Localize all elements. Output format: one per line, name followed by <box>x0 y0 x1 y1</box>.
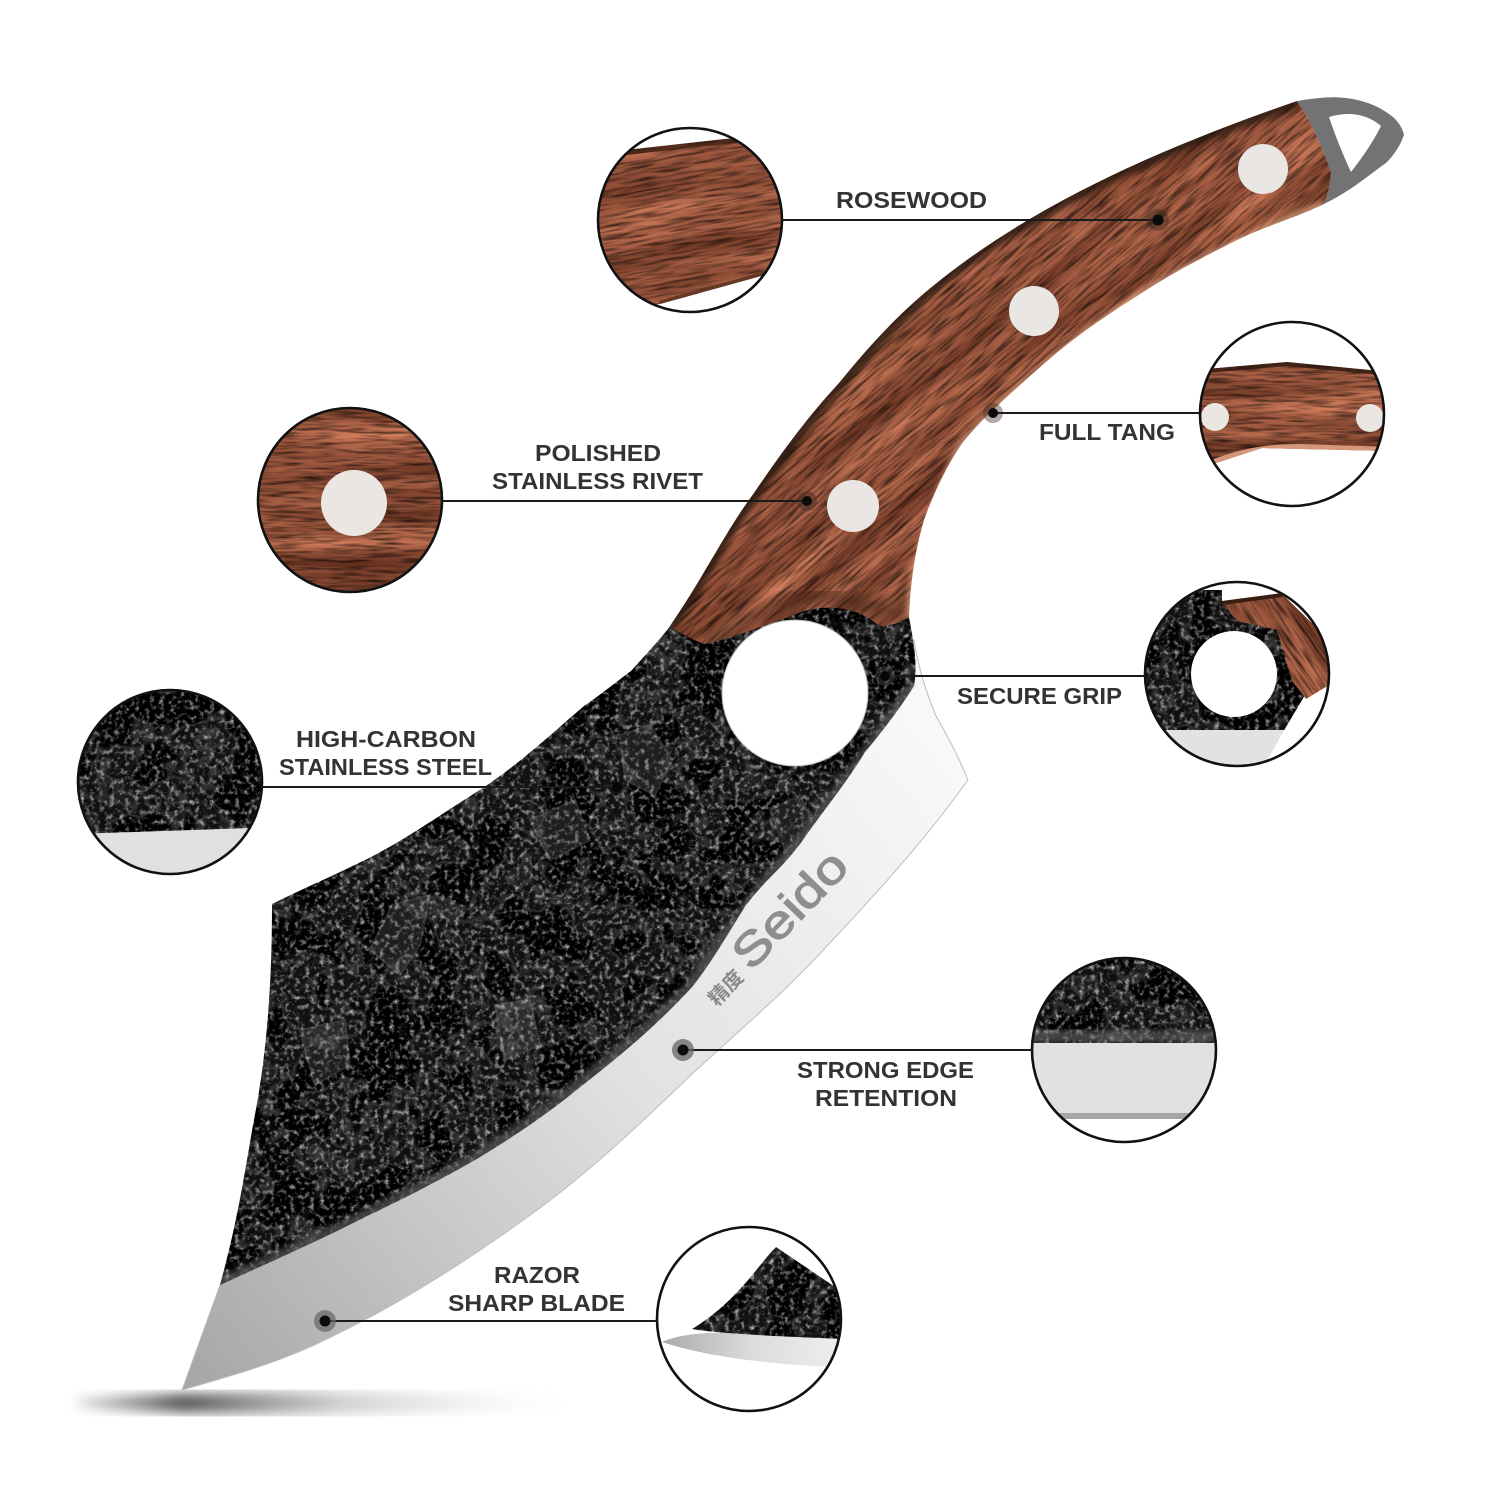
full tang leader line <box>993 412 1200 414</box>
edge label: RETENTION <box>815 1085 957 1111</box>
steel label: STAINLESS STEEL <box>279 754 492 780</box>
edge label: STRONG EDGE <box>797 1057 974 1083</box>
razor label: RAZOR <box>494 1262 580 1288</box>
rivet leader line <box>442 500 807 502</box>
rivet bottom <box>827 480 879 532</box>
razor leader line <box>325 1320 657 1322</box>
callout: polished stainless rivet <box>255 405 817 595</box>
rosewood detail circle <box>596 126 784 314</box>
edge leader line <box>683 1049 1032 1051</box>
blade polished bevel <box>182 640 968 1390</box>
callout: razor sharp blade <box>314 1227 850 1411</box>
edge marker <box>672 1039 694 1061</box>
rosewood label: ROSEWOOD <box>836 187 987 213</box>
blade logo Seido: Seido <box>721 839 858 979</box>
rosewood leader line <box>782 219 1158 221</box>
steel marker <box>612 782 622 792</box>
rivet middle <box>1009 286 1059 336</box>
steel leader line <box>262 786 617 788</box>
steel detail circle <box>75 688 265 880</box>
edge detail circle <box>1030 955 1220 1142</box>
callout: full tang <box>983 322 1395 506</box>
blade logo kanji: 精度 <box>704 966 748 1010</box>
rivet label: POLISHED <box>535 440 661 466</box>
rivet label: STAINLESS RIVET <box>492 468 703 494</box>
steel label: HIGH-CARBON <box>296 726 476 752</box>
secure grip marker <box>875 666 895 686</box>
razor label <box>448 1262 625 1316</box>
edge label <box>797 1057 974 1111</box>
rivet label <box>492 440 703 494</box>
steel tail at handle end <box>1297 97 1404 204</box>
blade forged dark steel <box>210 595 930 1300</box>
rivet top <box>1238 144 1288 194</box>
callout: rosewood <box>596 126 1169 314</box>
finger hole <box>722 620 868 766</box>
secure grip leader line <box>885 675 1145 677</box>
handle rosewood scale <box>670 101 1331 644</box>
rivet marker <box>797 491 817 511</box>
razor label: SHARP BLADE <box>448 1290 625 1316</box>
full tang marker <box>983 403 1003 423</box>
full tang detail circle <box>1195 322 1395 506</box>
callout: high-carbon stainless steel <box>75 688 622 880</box>
razor detail circle <box>657 1227 850 1411</box>
callout: strong edge retention <box>672 955 1220 1142</box>
secure grip detail circle <box>1144 580 1330 768</box>
callout: secure grip <box>875 580 1330 768</box>
rivet detail circle <box>255 405 445 595</box>
rosewood marker <box>1147 209 1169 231</box>
full tang label: FULL TANG <box>1039 419 1175 445</box>
razor marker <box>314 1310 336 1332</box>
steel label <box>279 726 492 780</box>
ground shadow under blade <box>75 1392 565 1414</box>
secure grip label: SECURE GRIP <box>957 683 1122 709</box>
